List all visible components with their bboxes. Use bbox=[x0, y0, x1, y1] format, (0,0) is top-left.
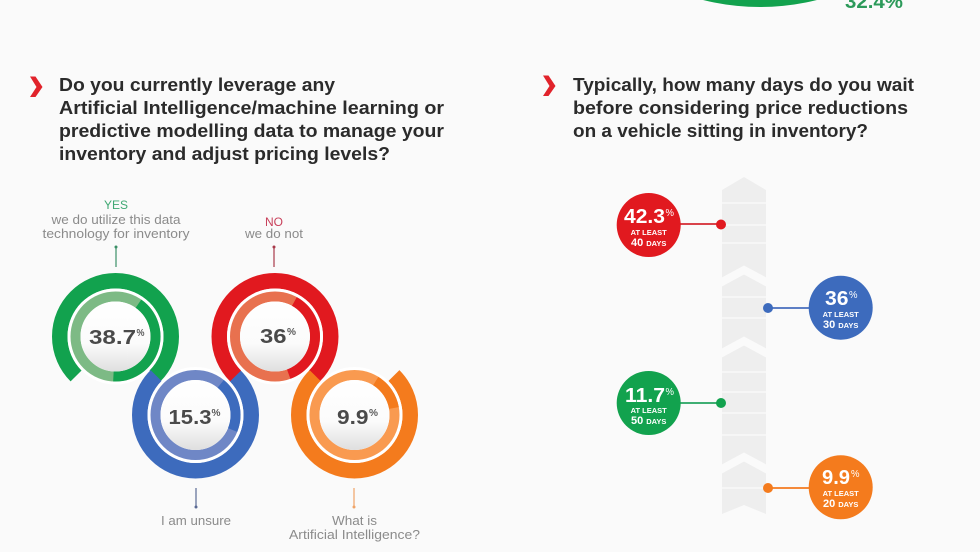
heading: AI question: inventory and adjust pricing levels? bbox=[59, 143, 390, 164]
label: yes bbox=[42, 198, 190, 267]
ring chart: no 36%: % bbox=[287, 327, 296, 338]
ring chart: no 36%: 36 bbox=[260, 325, 286, 348]
callout: 36% at least 30 days: AT LEAST bbox=[823, 310, 859, 319]
ring chart: yes 38.7%: % bbox=[136, 328, 145, 339]
icon: red chevron left bbox=[30, 76, 42, 97]
label: no bbox=[244, 215, 304, 267]
callout: 11.7% at least 50 days: % bbox=[666, 387, 674, 398]
callout: 36% at least 30 days: % bbox=[849, 290, 858, 301]
ring chart: what is AI 9.9%: 9.9 bbox=[337, 406, 368, 429]
callout: 11.7% at least 50 days: 11.7 bbox=[625, 385, 665, 407]
label: what is AI: Artificial Intelligence? bbox=[289, 528, 420, 542]
label: no: NO bbox=[265, 215, 283, 229]
label: unsure bbox=[161, 488, 231, 528]
top chart remnant: green pie segment bbox=[525, 0, 980, 7]
callout: 9.9% at least 20 days bbox=[763, 455, 873, 519]
panel: price reduction timing question bbox=[543, 74, 919, 519]
chevron timeline column bbox=[720, 177, 768, 514]
callout: 36% at least 30 days bbox=[763, 276, 873, 340]
label: yes: technology for inventory bbox=[42, 227, 190, 241]
callout: 11.7% at least 50 days: 50 DAYS bbox=[631, 415, 666, 427]
heading: days question: Typically, how many days do you wait bbox=[573, 74, 914, 95]
callout: 9.9% at least 20 days: 9.9 bbox=[822, 467, 850, 489]
callout: 9.9% at least 20 days: AT LEAST bbox=[823, 489, 859, 498]
ring chart: yes 38.7%: 38.7 bbox=[89, 326, 136, 349]
heading: AI question: Do you currently leverage any bbox=[59, 74, 336, 95]
callout: 36% at least 30 days: 36 bbox=[825, 288, 848, 310]
icon: red chevron right bbox=[543, 76, 556, 96]
ring chart: yes 38.7% bbox=[60, 281, 171, 384]
ring chart: unsure 15.3% bbox=[140, 367, 251, 471]
label: unsure: I am unsure bbox=[161, 514, 231, 528]
label: what is AI bbox=[289, 488, 420, 542]
ring chart: unsure 15.3%: 15.3 bbox=[168, 406, 212, 429]
callout: 9.9% at least 20 days: % bbox=[851, 469, 860, 480]
heading: AI question: predictive modelling data to manage your bbox=[59, 120, 444, 141]
heading: AI question: Artificial Intelligence/machine learning or bbox=[59, 97, 444, 118]
callout: 42.3% at least 40 days: 40 DAYS bbox=[631, 237, 666, 249]
callout: 11.7% at least 50 days bbox=[617, 371, 726, 435]
callout: 42.3% at least 40 days bbox=[617, 193, 726, 257]
callout: 9.9% at least 20 days: 20 DAYS bbox=[823, 498, 858, 510]
heading: days question: before considering price reductions bbox=[573, 97, 908, 118]
callout: 42.3% at least 40 days: 42.3 bbox=[624, 206, 665, 228]
label: what is AI: What is bbox=[332, 514, 377, 528]
panel: AI usage question bbox=[30, 74, 449, 542]
label: no: we do not bbox=[244, 227, 304, 241]
callout: 42.3% at least 40 days: % bbox=[666, 208, 674, 219]
callout: 11.7% at least 50 days: AT LEAST bbox=[631, 406, 667, 415]
ring chart: what is AI 9.9%: % bbox=[369, 408, 378, 419]
ring chart: what is AI 9.9% bbox=[299, 367, 410, 471]
label: yes: YES bbox=[104, 198, 128, 212]
ring chart: no 36% bbox=[219, 281, 331, 384]
callout: 42.3% at least 40 days: AT LEAST bbox=[631, 228, 667, 237]
label: yes: we do utilize this data bbox=[50, 213, 181, 227]
ring chart: unsure 15.3%: % bbox=[212, 408, 221, 419]
callout: 36% at least 30 days: 30 DAYS bbox=[823, 319, 858, 331]
heading: days question: on a vehicle sitting in inventory? bbox=[573, 120, 868, 141]
